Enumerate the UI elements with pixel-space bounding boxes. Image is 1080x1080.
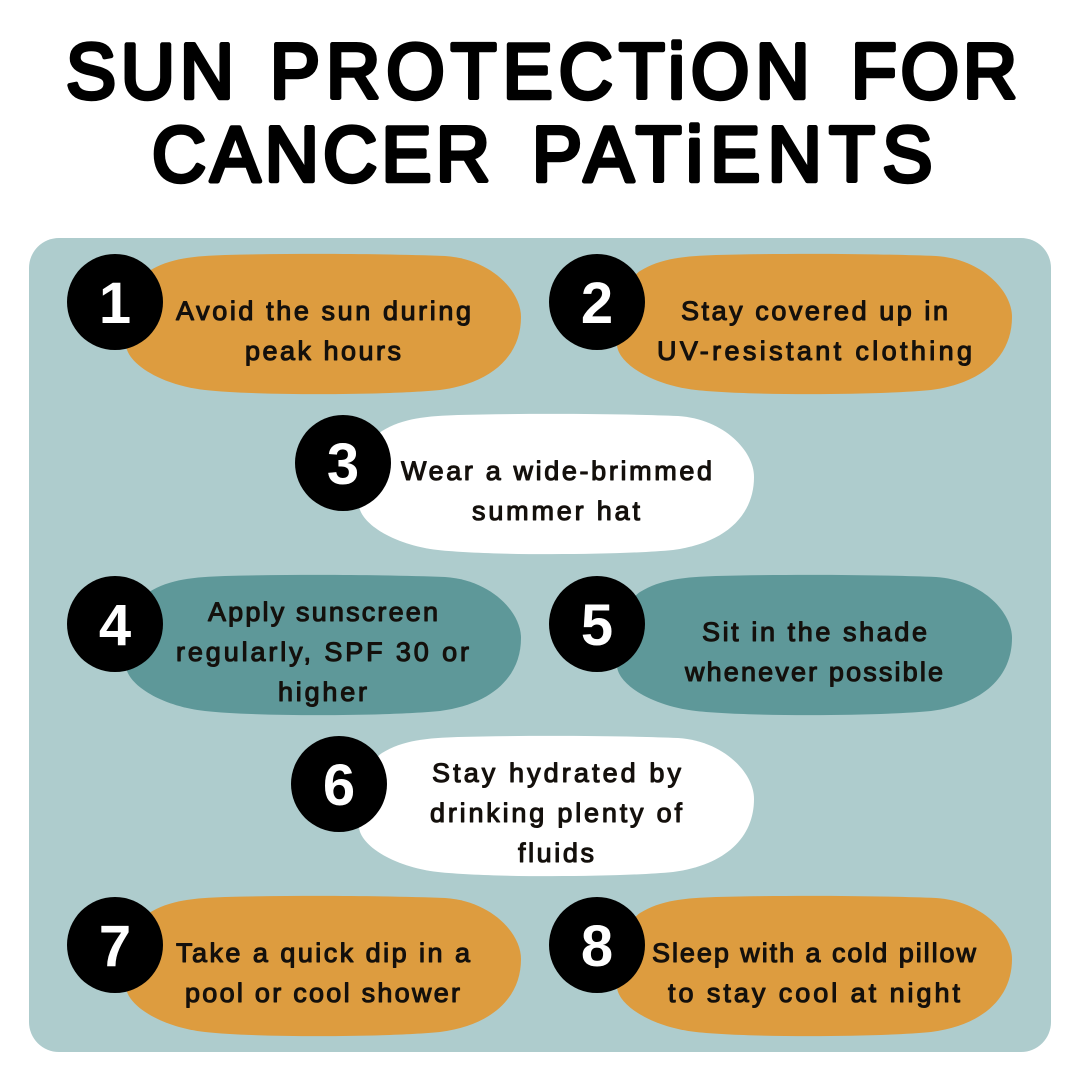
tip 2: 2 [581,271,613,336]
tip 5: Sit in the shade [702,617,927,647]
tip 6: 6 [323,753,355,818]
title: CANCER [152,112,490,198]
title: PROTECTiON [270,29,810,115]
tip 6: drinking plenty of [430,798,682,828]
tip 7 [67,896,521,1036]
tip 5: whenever possible [684,657,943,687]
tip 5 [549,575,1012,715]
tip 4 [67,575,521,715]
panel: tips background [29,238,1051,1052]
tip 1: peak hours [245,336,401,366]
title: PATiENTS [532,112,932,198]
tip 3: 3 [327,432,359,497]
tip 6: Stay hydrated by [432,758,682,788]
tip 7: pool or cool shower [185,978,460,1008]
tip 7: 7 [99,914,131,979]
title: FOR [851,29,1017,115]
tip 1: Avoid the sun during [176,296,471,326]
tip 1: 1 [99,271,131,336]
tip 4: 4 [99,593,131,658]
tip 4: regularly, SPF 30 or [176,637,469,667]
tip 5: 5 [581,593,613,658]
tip 2: Stay covered up in [681,296,948,326]
tip 3: Wear a wide-brimmed [401,456,712,486]
tip 8: to stay cool at night [668,978,960,1008]
tip 8 [549,896,1012,1036]
tip 1 [67,254,521,394]
tip 6: fluids [518,838,594,868]
tip 4: Apply sunscreen [208,597,438,627]
tip 8: 8 [581,914,613,979]
tip 6 [291,736,754,876]
tip 4: higher [278,677,367,707]
title [66,29,1017,198]
title: SUN [66,29,234,115]
tip 7: Take a quick dip in a [176,938,471,968]
tip 3 [295,414,754,554]
tip 8: Sleep with a cold pillow [652,938,976,968]
tip 2: UV-resistant clothing [657,336,972,366]
tip 3: summer hat [472,496,640,526]
tip 2 [549,254,1012,394]
